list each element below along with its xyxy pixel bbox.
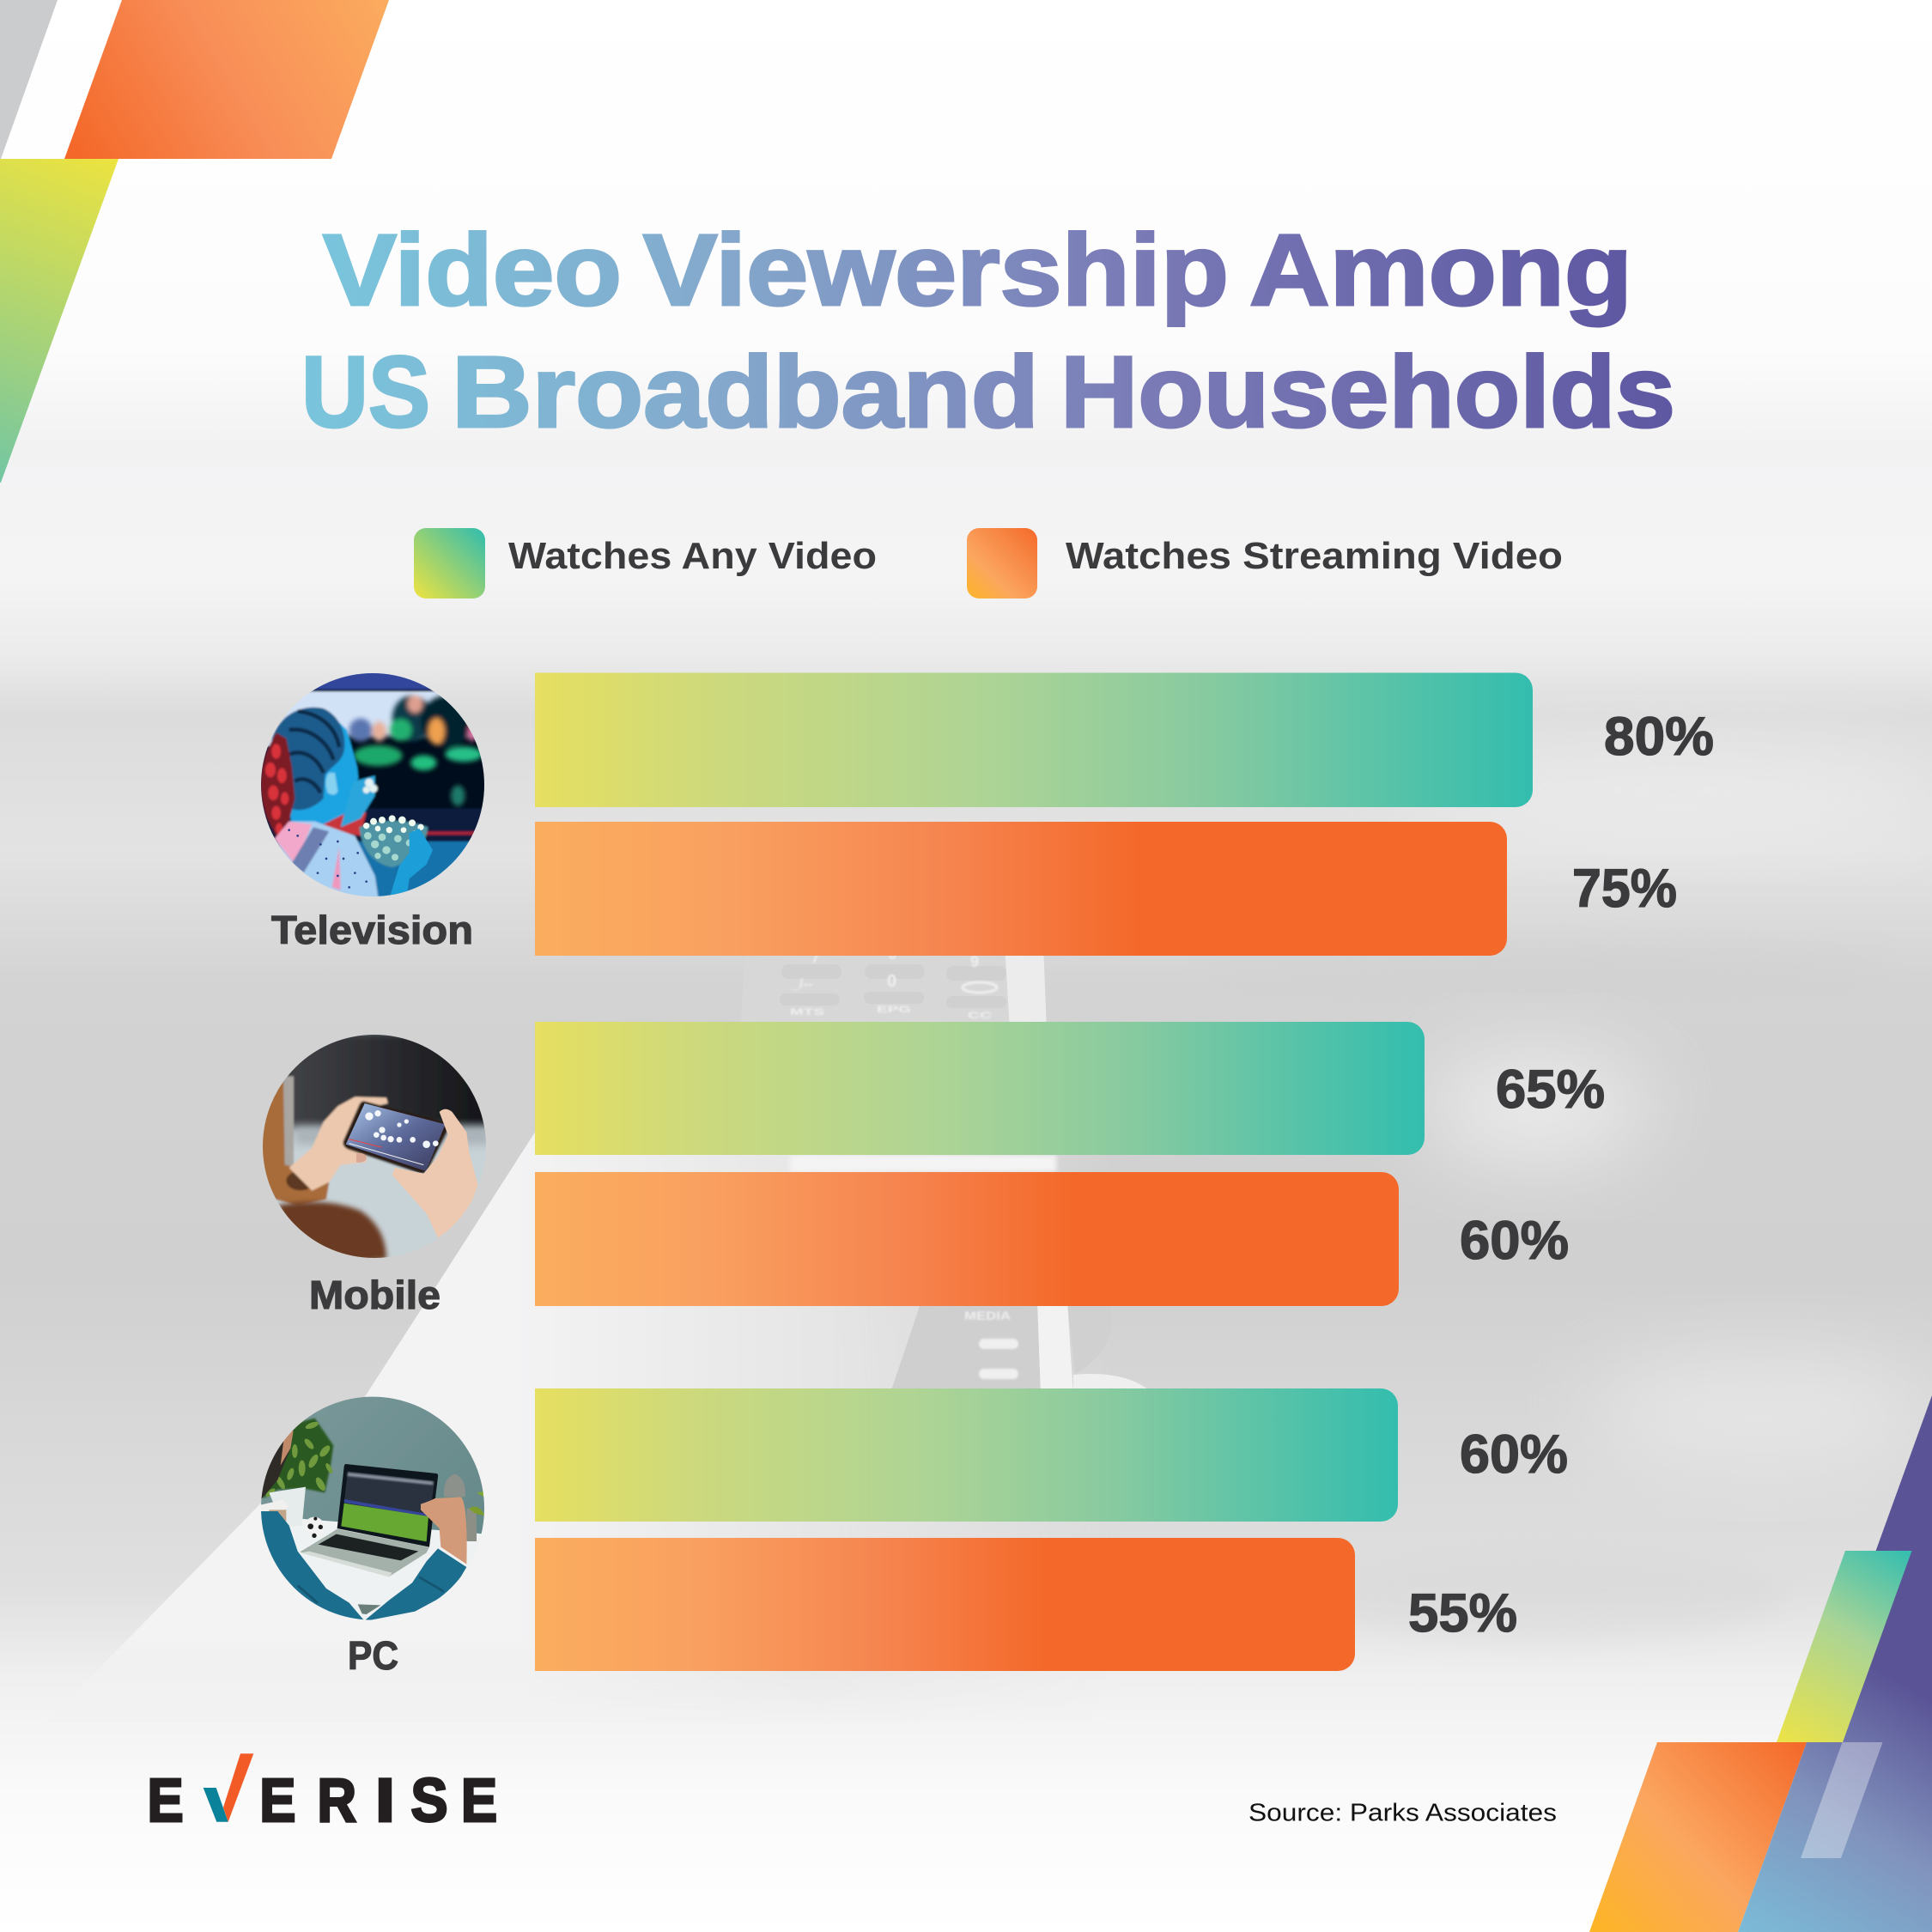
source note: Source: Parks Associates: [1249, 1800, 1557, 1827]
percentage values: [1408, 707, 1714, 1643]
logo: everise: S: [410, 1767, 448, 1835]
percentage values: 75%: [1572, 859, 1677, 919]
remote control (background photo): 9: [970, 953, 979, 970]
remote control (background photo): 8: [889, 948, 896, 963]
legend: [414, 528, 1563, 598]
logo: everise: I: [375, 1767, 395, 1835]
logo: everise: E: [461, 1767, 497, 1835]
title: Households: [1060, 336, 1675, 449]
logo: everise: E: [259, 1767, 295, 1835]
percentage values: 65%: [1496, 1060, 1605, 1120]
legend: Watches Any Video: [508, 535, 877, 577]
icon: television photo circle: [258, 670, 489, 904]
title: US: [301, 336, 430, 449]
remote control (background photo): EPG: [877, 1005, 911, 1015]
logo: everise: [148, 1753, 497, 1835]
remote control (background photo): 7: [811, 951, 819, 966]
logo: everise: E: [148, 1767, 184, 1835]
percentage values: 55%: [1408, 1583, 1517, 1643]
remote control (background photo): MTS: [790, 1007, 824, 1018]
decor: top-left shapes: [0, 0, 389, 483]
label: mobile: Mobile: [309, 1273, 440, 1317]
title: Viewership: [643, 214, 1229, 327]
title: Video: [323, 214, 622, 327]
bar chart: [535, 673, 1533, 1671]
bar: television any video 80%: [535, 673, 1533, 807]
remote control (background photo): CC: [968, 1011, 992, 1021]
bar: mobile any video 65%: [535, 1022, 1425, 1155]
logo check mark: [204, 1753, 253, 1822]
icon: pc photo circle: [258, 1394, 492, 1629]
bar: pc any video 60%: [535, 1388, 1398, 1522]
title: [301, 214, 1675, 449]
remote control (background photo): _/--: [791, 977, 812, 992]
remote control (background photo): [740, 945, 1155, 1395]
bar: mobile streaming 60%: [535, 1172, 1399, 1306]
label: pc: PC: [348, 1633, 398, 1678]
percentage values: 60%: [1460, 1211, 1569, 1271]
label: television: Television: [271, 908, 473, 952]
percentage values: 80%: [1604, 707, 1714, 767]
title: Among: [1249, 214, 1632, 327]
percentage values: 60%: [1460, 1425, 1568, 1485]
decor: bottom-right shapes: [1589, 1395, 1932, 1932]
remote control (background photo): MEDIA: [964, 1309, 1011, 1322]
background photo wash: [0, 397, 1932, 1760]
bar: pc streaming 55%: [535, 1538, 1355, 1671]
title: Broadband: [452, 336, 1039, 449]
remote control (background photo): 0: [887, 972, 896, 991]
logo: everise: R: [318, 1767, 356, 1835]
icon: mobile photo circle: [258, 1030, 492, 1265]
bar: television streaming 75%: [535, 822, 1507, 956]
legend: Watches Streaming Video: [1066, 535, 1563, 577]
